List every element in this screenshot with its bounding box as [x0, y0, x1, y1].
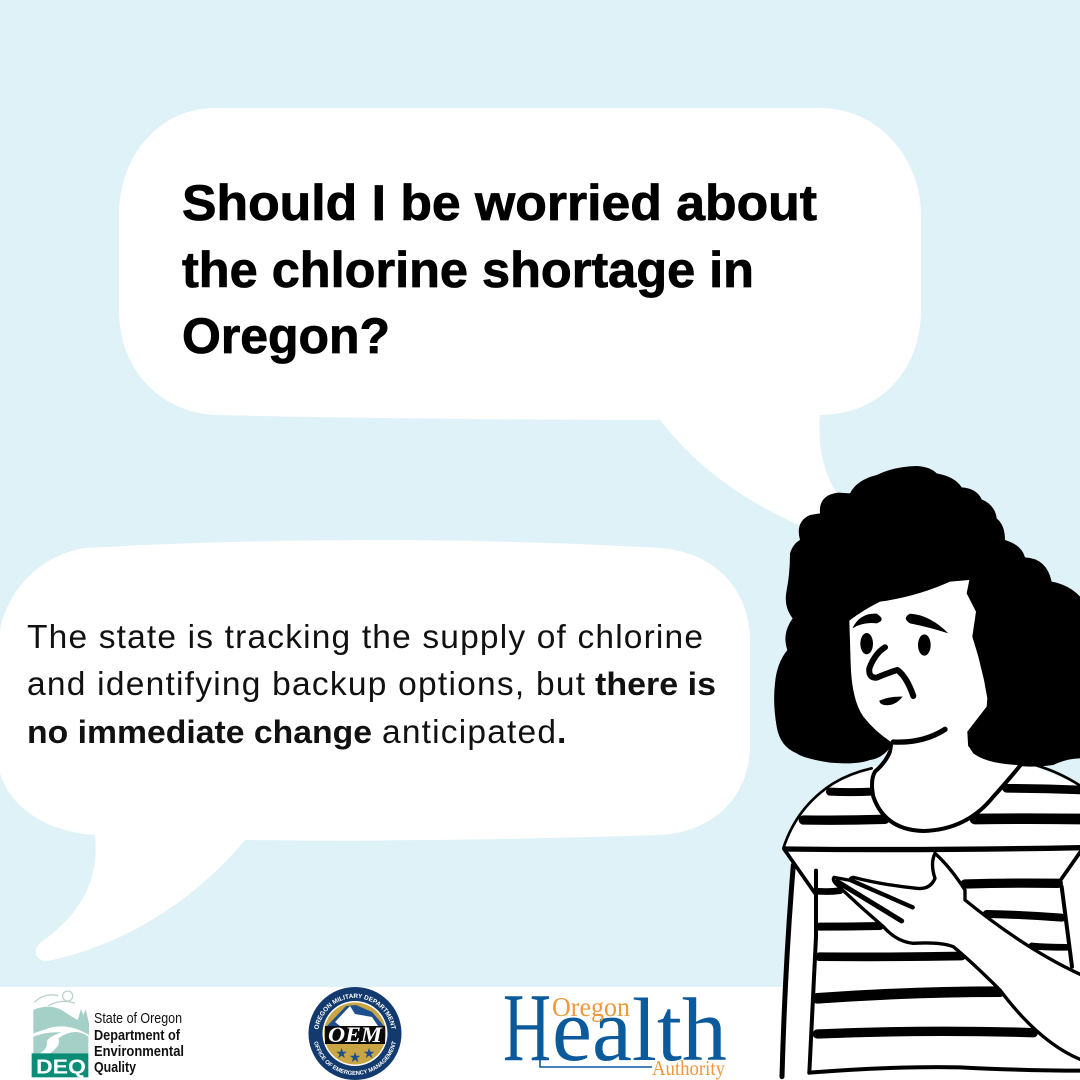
icon: three stars — [335, 1045, 375, 1065]
logo: Oregon Military Department OEM seal: OREGON MILITARY DEPARTMENT — [314, 994, 396, 1030]
panel: answer speech bubble — [0, 540, 750, 961]
panel: question speech bubble — [119, 108, 921, 530]
text: answer: The state is tracking the supply of chlorine — [27, 619, 703, 656]
heading: question: the chlorine shortage in — [182, 242, 754, 298]
icon: three stars: ★ — [335, 1045, 348, 1061]
logo: Oregon Military Department OEM seal: OFFICE OF EMERGENCY MANAGEMENT — [314, 1040, 396, 1075]
eyes — [860, 633, 873, 654]
heading: question: Should I be worried about — [182, 175, 817, 231]
text: DEQ agency name: State of Oregon — [94, 1010, 182, 1027]
body and shirt — [782, 743, 1080, 1080]
illustration: worried woman — [774, 466, 1080, 1080]
icon: three stars: ★ — [363, 1045, 375, 1061]
logo: Oregon DEQ — [32, 991, 184, 1078]
eyebrows — [852, 614, 882, 628]
neck collar — [872, 743, 1023, 831]
logo: Oregon Health Authority: Authority — [652, 1056, 725, 1080]
text: DEQ agency name: Environmental — [94, 1043, 184, 1060]
text: answer: . — [557, 714, 566, 751]
nose — [869, 647, 913, 696]
text: answer: and identifying backup options, but — [27, 666, 586, 703]
logo: Oregon Health Authority: ealth — [552, 981, 727, 1080]
text: answer: no immediate change — [27, 714, 372, 750]
arm and hand — [833, 853, 1080, 1060]
logo: Oregon Health Authority: Oregon — [552, 992, 630, 1022]
icon: DEQ landscape: DEQ — [36, 1056, 86, 1078]
icon: three stars: ★ — [349, 1049, 361, 1065]
text: DEQ agency name: Department of — [94, 1027, 181, 1044]
stripes — [830, 780, 872, 804]
text: DEQ agency name: Quality — [94, 1059, 137, 1076]
icon: DEQ landscape — [32, 991, 89, 1078]
text: answer: there is — [595, 666, 716, 702]
text: DEQ agency name — [94, 1010, 184, 1076]
mouth — [879, 697, 903, 705]
hair and face — [774, 466, 1080, 783]
logo: Oregon Military Department OEM seal: OEM — [328, 1022, 384, 1047]
logo: Oregon Health Authority: H — [503, 974, 551, 1080]
text: answer: anticipated — [382, 714, 556, 751]
heading: question — [182, 175, 817, 364]
logo: Oregon Military Department OEM seal — [308, 987, 402, 1080]
text: answer — [27, 619, 716, 751]
heading: question: Oregon? — [182, 308, 390, 364]
